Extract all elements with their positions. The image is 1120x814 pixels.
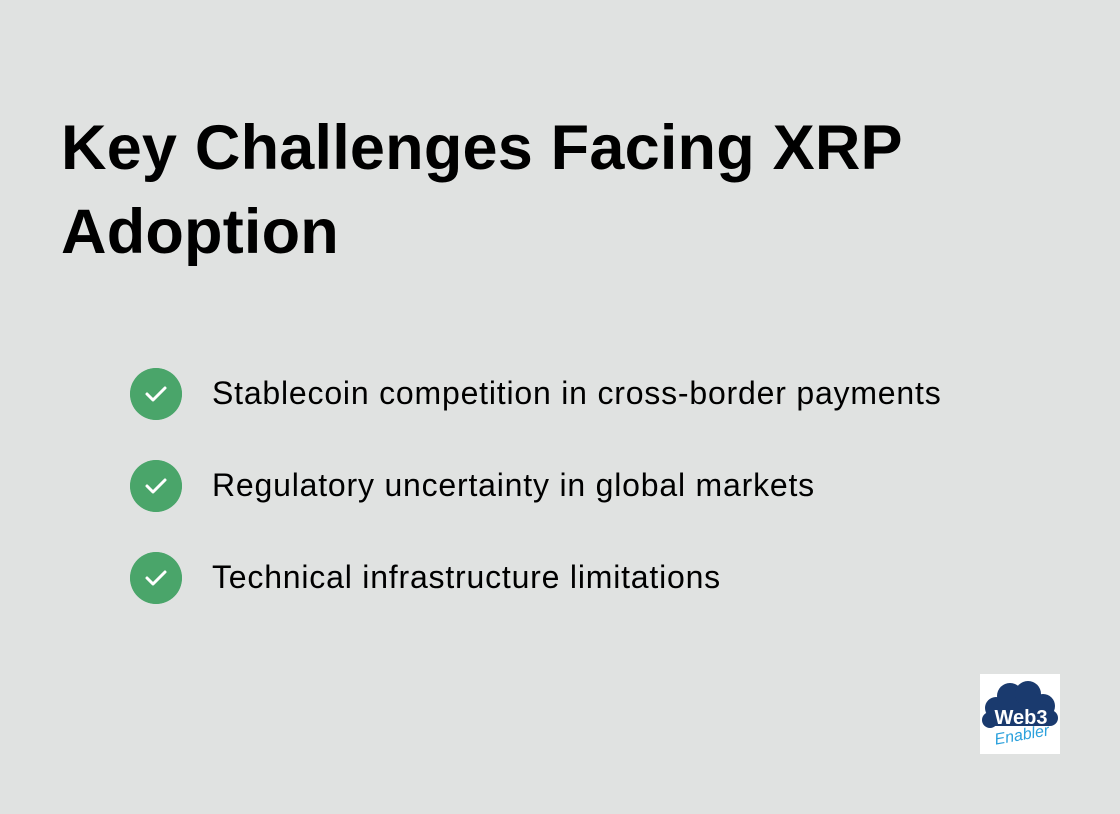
logo	[980, 674, 1060, 754]
logo: Web3	[995, 707, 1047, 729]
text: Stablecoin competition in cross-border payments	[212, 375, 942, 411]
title: Key Challenges Facing XRP Adoption	[61, 113, 902, 267]
logo: Enabler	[993, 722, 1051, 749]
text: Regulatory uncertainty in global markets	[212, 467, 815, 503]
item: stablecoin	[130, 368, 942, 420]
icon: check	[130, 552, 182, 604]
item: technical	[130, 552, 721, 604]
icon: check	[130, 368, 182, 420]
item: regulatory	[130, 460, 815, 512]
text: Technical infrastructure limitations	[212, 559, 721, 595]
icon: check	[130, 460, 182, 512]
